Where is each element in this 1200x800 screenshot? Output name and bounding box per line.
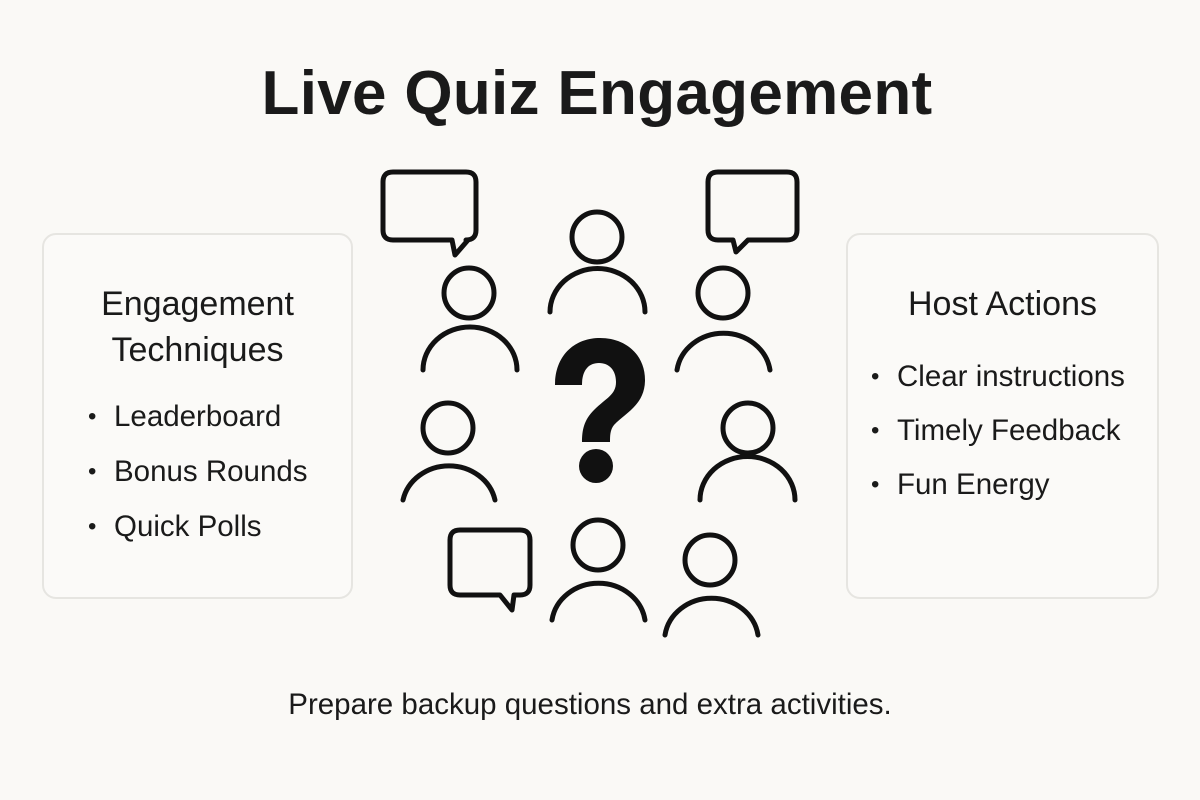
icon: speech bubble 2 bbox=[708, 172, 797, 252]
icon: person 5 bbox=[700, 403, 795, 500]
icon: person 7 bbox=[665, 535, 758, 635]
icon: person 3 bbox=[677, 268, 770, 370]
title: Live Quiz Engagement bbox=[262, 59, 932, 128]
heading: engagement techniques bbox=[101, 285, 294, 369]
icon: person 6 bbox=[552, 520, 645, 620]
icon: person 1 bbox=[423, 268, 517, 370]
panel: engagement techniques bbox=[42, 233, 353, 599]
bullet list: techniques: Leaderboard bbox=[114, 400, 281, 433]
heading: host actions: Host Actions bbox=[908, 285, 1097, 323]
heading: engagement techniques: Techniques bbox=[111, 331, 284, 369]
icon: speech bubble 1 bbox=[383, 172, 476, 255]
bullet list: techniques: Bonus Rounds bbox=[114, 455, 308, 488]
bullet list: host actions: Timely Feedback bbox=[897, 414, 1121, 447]
bullet list: host actions: Fun Energy bbox=[897, 468, 1050, 501]
footer note: Prepare backup questions and extra activities. bbox=[288, 688, 892, 721]
bullet list: techniques bbox=[88, 400, 308, 543]
bullet list: host actions: Clear instructions bbox=[897, 360, 1125, 393]
bullet list: techniques: Quick Polls bbox=[114, 510, 262, 543]
bullet list: host actions bbox=[872, 360, 1125, 501]
icon: person 4 bbox=[403, 403, 495, 500]
heading: engagement techniques: Engagement bbox=[101, 285, 294, 323]
icon: speech bubble 3 bbox=[450, 530, 530, 610]
panel: host actions bbox=[846, 233, 1159, 599]
icon: question mark bbox=[555, 338, 645, 483]
icon: person 2 bbox=[550, 212, 645, 312]
